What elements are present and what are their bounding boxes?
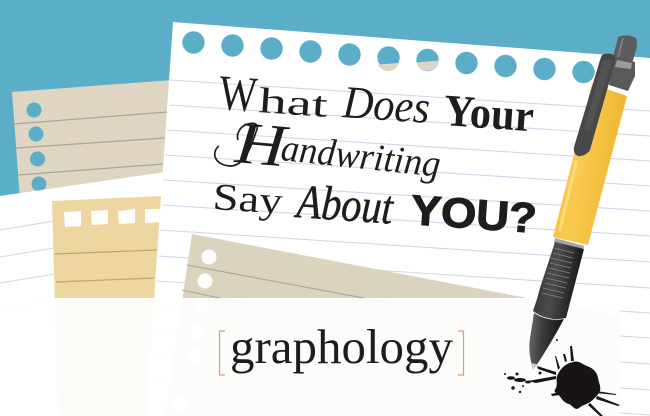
left bracket [220, 331, 225, 375]
flourish on H [215, 123, 257, 166]
word: About: About [293, 175, 396, 235]
left white paper [0, 172, 165, 416]
word: Handwriting, capital: H [232, 109, 293, 180]
barrel highlight [558, 160, 578, 232]
pen [529, 35, 637, 370]
pen collar [609, 57, 635, 91]
paper holes [174, 250, 216, 412]
pocket clip [574, 54, 615, 156]
tan paper seen through two holes [378, 60, 438, 71]
word: graphology [230, 319, 453, 374]
metal ring [554, 238, 584, 250]
pen tip [531, 363, 537, 370]
top punch holes [182, 31, 595, 83]
word: What, rest: hat [257, 80, 329, 125]
back tan paper [12, 80, 172, 200]
inner tan paper [165, 234, 620, 416]
yellow barrel [553, 84, 627, 245]
subtitle: graphology [220, 319, 464, 375]
cap highlight [618, 38, 623, 57]
main lined paper [146, 22, 650, 416]
yellow note paper [52, 196, 162, 416]
translucent overlay [0, 298, 620, 416]
pen cone [529, 313, 564, 366]
word: What, capital: W [217, 64, 260, 123]
ink splatter [504, 339, 620, 416]
word: Handwriting, rest: andwriting [279, 127, 443, 186]
pen cap [612, 35, 637, 64]
rubber grip [533, 242, 584, 319]
word: Say: Say [211, 176, 284, 223]
right bracket [458, 331, 464, 375]
word: YOU?: YOU? [409, 186, 538, 242]
punch holes [26, 102, 46, 192]
word: Does: Does [340, 76, 432, 133]
title [211, 64, 538, 242]
word: Your: Your [442, 85, 536, 141]
square perforations [64, 209, 162, 227]
grip ridges [542, 248, 574, 298]
